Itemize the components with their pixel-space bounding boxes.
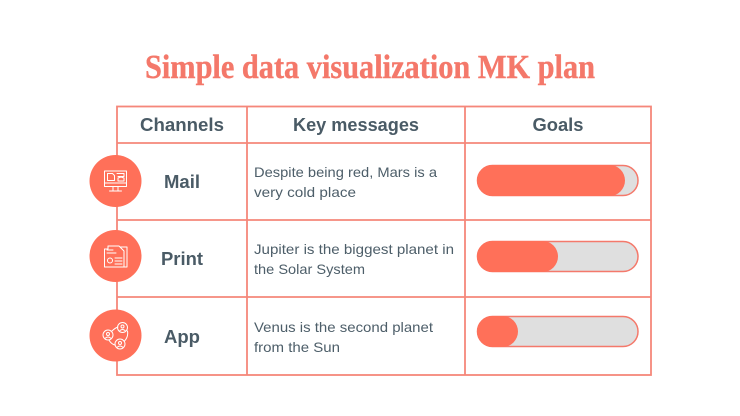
message: print <box>254 241 454 277</box>
title: Simple data visualization MK plan <box>145 49 595 86</box>
heading: goals: Goals <box>532 115 584 135</box>
heading: key messages: Key messages <box>293 115 419 135</box>
icon: mail monitor <box>90 155 142 207</box>
goal bar: mail <box>477 165 638 196</box>
message: app <box>254 319 433 355</box>
goal bar: print <box>477 241 638 272</box>
table grid <box>117 106 651 375</box>
icon: print document <box>90 230 142 282</box>
message: print: the Solar System <box>254 261 365 277</box>
label: mail: Mail <box>164 172 200 192</box>
icon: app network <box>90 310 142 362</box>
goal bar: app <box>477 316 638 347</box>
label: print: Print <box>161 249 203 269</box>
message: mail <box>254 164 437 200</box>
message: mail: Despite being red, Mars is a <box>254 164 437 180</box>
message: print: Jupiter is the biggest planet in <box>254 241 454 257</box>
heading: channels: Channels <box>140 115 224 135</box>
message: app: Venus is the second planet <box>254 319 433 335</box>
label: app: App <box>164 327 200 347</box>
message: mail: very cold place <box>254 184 356 200</box>
message: app: from the Sun <box>254 339 340 355</box>
